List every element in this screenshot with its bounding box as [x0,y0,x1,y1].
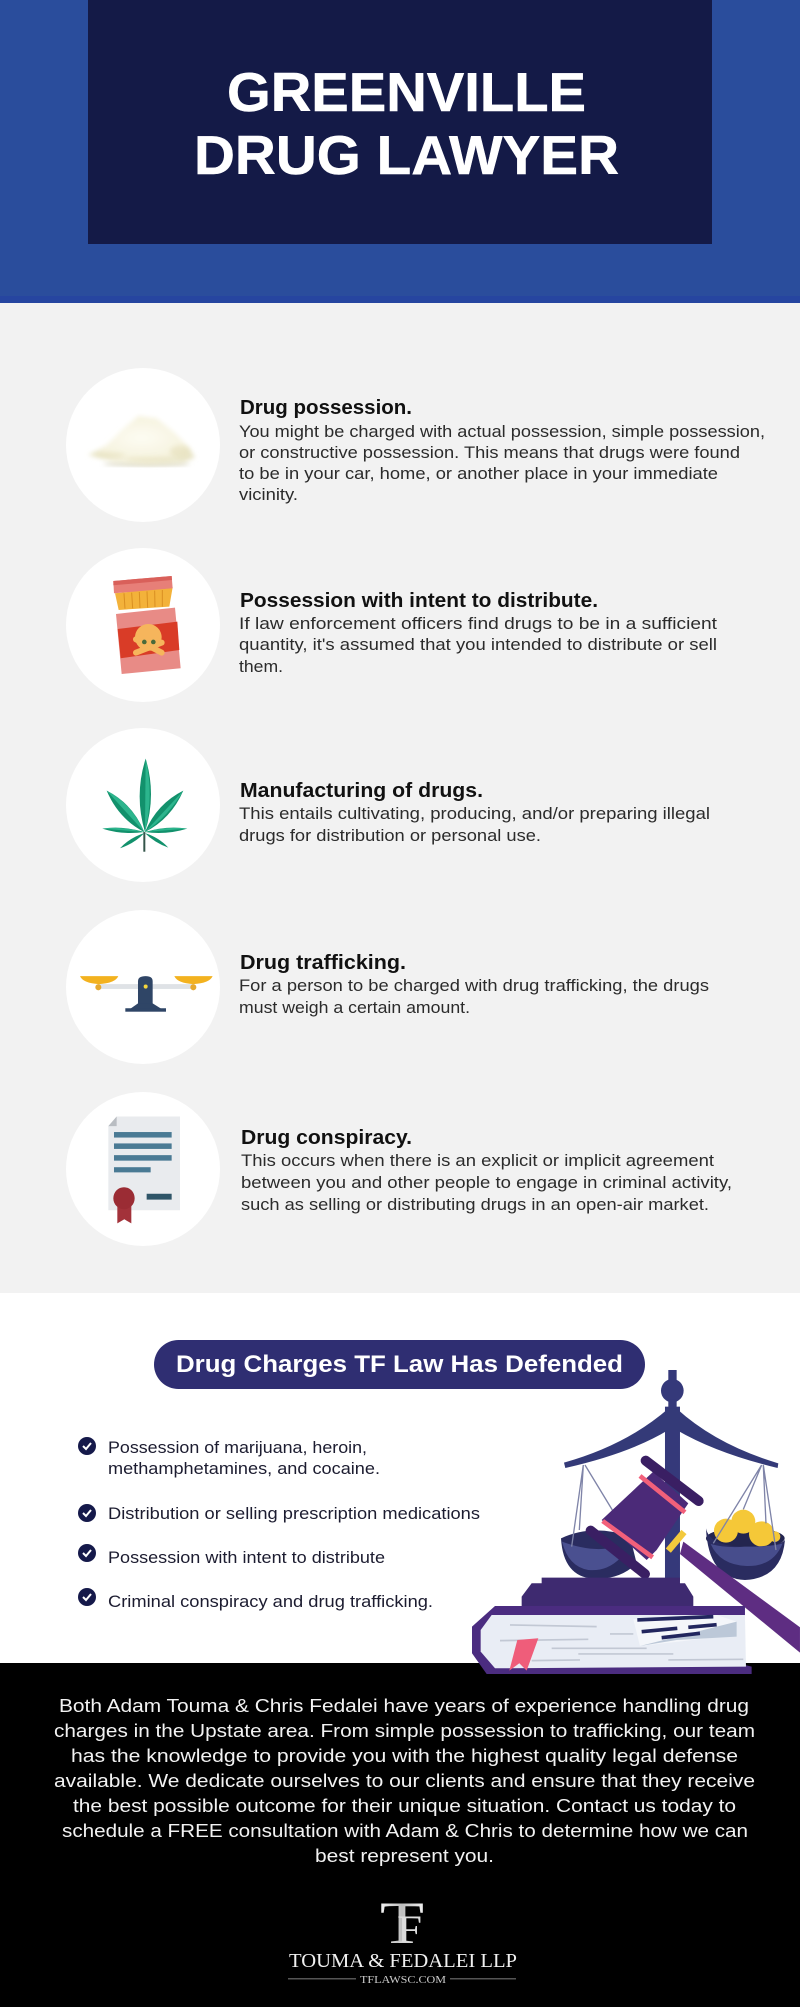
text block: between you and other people to engage in criminal activity, [241,1173,732,1192]
right pan [706,1528,785,1580]
text block: If law enforcement officers find drugs to be in a sufficient [239,614,717,633]
text block [54,1695,755,1866]
logo: Touma & Fedalei LLP [288,1890,517,1986]
text block: best represent you. [315,1845,494,1866]
title: GREENVILLE [227,61,586,123]
text block: such as selling or distributing drugs in an open-air market. [241,1195,709,1214]
heading pill [154,1340,645,1389]
item: conspiracy [66,1092,732,1246]
right pan back [706,1528,785,1549]
heading: Possession with intent to distribute. [240,590,598,612]
panel: charges defended [0,1293,800,1663]
text block: charges in the Upstate area. From simple possession to trafficking, our team [54,1720,755,1741]
logo: Touma & Fedalei LLP: TFLAWSC.COM [360,1975,446,1986]
text block: to be in your car, home, or another place in your immediate [239,464,718,483]
heading: Drug conspiracy. [241,1127,412,1149]
heading: Drug trafficking. [240,952,406,974]
item: trafficking [66,910,709,1064]
text block: vicinity. [239,485,298,504]
check item 3: Possession with intent to distribute [108,1548,385,1567]
heading pill: Drug Charges TF Law Has Defended [176,1351,623,1378]
text block: quantity, it's assumed that you intended to distribute or sell [239,635,717,654]
text block [239,614,717,676]
checklist [78,1437,480,1611]
text block: For a person to be charged with drug trafficking, the drugs [239,976,709,995]
text block [239,976,709,1017]
scale post [661,1370,684,1582]
check item 1 [78,1437,380,1478]
title: DRUG LAWYER [194,124,619,186]
check item 1: Possession of marijuana, heroin, [108,1438,367,1457]
scale beam [564,1409,778,1468]
text block: them. [239,657,283,676]
text block: or constructive possession. This means that drugs were found [239,443,740,462]
check item 4: Criminal conspiracy and drug trafficking. [108,1592,433,1611]
logo: Touma & Fedalei LLP: F [397,1907,422,1952]
heading: Drug possession. [240,397,412,419]
item: manufacturing [66,728,710,882]
bookmark [509,1638,538,1671]
illustration: scales, gavel and book [472,1370,800,1674]
text block: schedule a FREE consultation with Adam & Chris to determine how we can [62,1820,748,1841]
icon: powder pile [88,416,195,466]
title [194,61,619,186]
text block: You might be charged with actual possession, simple possession, [239,422,765,441]
icon: box with skull [113,576,181,674]
text block: drugs for distribution or personal use. [239,826,541,845]
pedestal [522,1578,693,1606]
text block: available. We dedicate ourselves to our clients and ensure that they receive [54,1770,755,1791]
left pan [561,1530,637,1579]
check item 1: methamphetamines, and cocaine. [108,1459,380,1478]
icon: cannabis leaf [102,759,187,852]
gavel [591,1461,800,1653]
text block: the best possible outcome for their unique situation. Contact us today to [73,1795,736,1816]
item: possession with intent [66,548,717,702]
text block: must weigh a certain amount. [239,998,470,1017]
text block [239,804,710,845]
heading: Manufacturing of drugs. [240,780,483,802]
check item 2: Distribution or selling prescription medications [108,1504,480,1523]
logo: Touma & Fedalei LLP: T [380,1890,424,1956]
text block [241,1151,732,1214]
scale strings [572,1465,776,1550]
panel: charge types [0,303,800,1293]
item: drug possession [66,368,765,522]
text block: This occurs when there is an explicit or implicit agreement [241,1151,714,1170]
panel: closing statement [0,1663,800,2007]
text block [239,422,765,504]
text block: has the knowledge to provide you with the highest quality legal defense [71,1745,738,1766]
book [472,1606,752,1674]
panel: header banner [0,0,800,303]
icon: document with seal [108,1117,180,1223]
icon: balance [80,976,213,1012]
coins [714,1510,780,1547]
logo: Touma & Fedalei LLP: TOUMA & FEDALEI LLP [289,1950,517,1972]
text block: Both Adam Touma & Chris Fedalei have years of experience handling drug [59,1695,749,1716]
text block: This entails cultivating, producing, and/or preparing illegal [239,804,710,823]
